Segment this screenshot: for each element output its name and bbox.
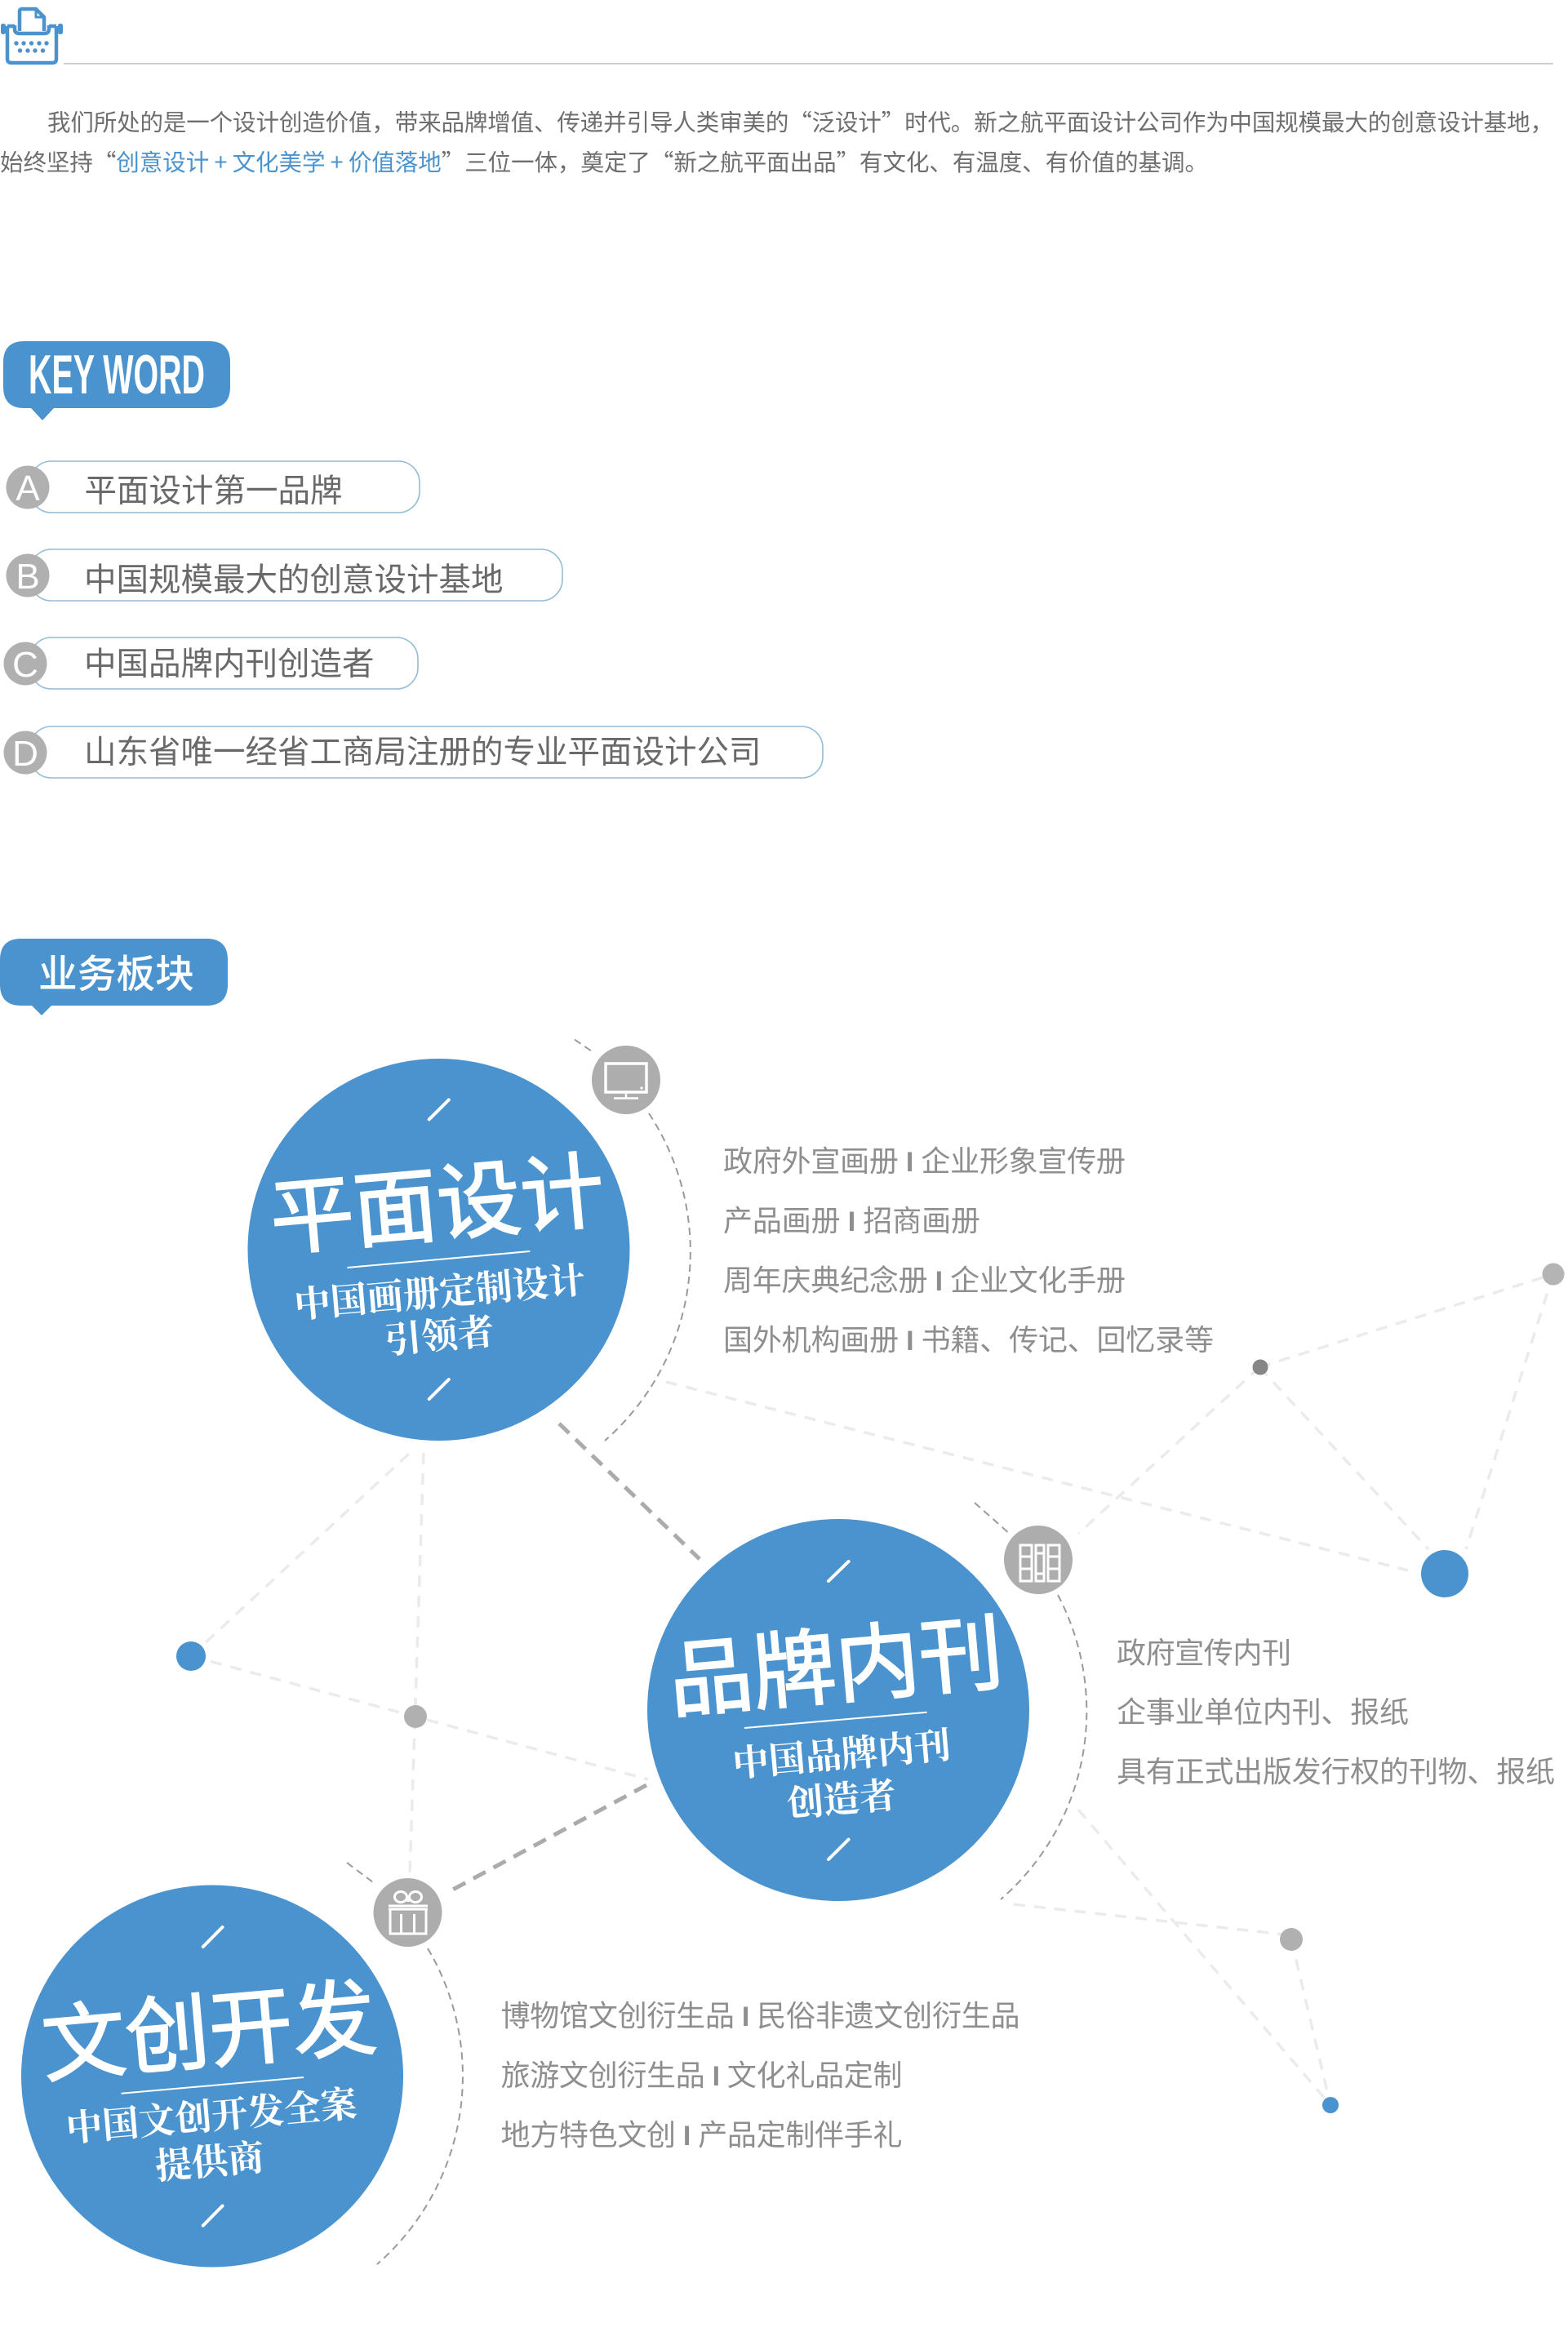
panel: cultural products: 中国文创开发全案 bbox=[64, 2075, 359, 2152]
panel: cultural products: 文创开发 bbox=[37, 1949, 380, 2100]
heading: business sections: 业务板块 bbox=[38, 943, 194, 999]
keyword C: 中国品牌内刊创造者 bbox=[84, 638, 374, 685]
panel: graphic design bbox=[248, 1040, 691, 1441]
text: brand journal services bbox=[1117, 1629, 1555, 1791]
icon: monitor bbox=[592, 1046, 660, 1114]
panel: brand journal: 品牌内刊 bbox=[664, 1584, 1007, 1735]
connector: brand journal to cultural products bbox=[450, 1785, 646, 1891]
keyword A: 平面设计第一品牌 bbox=[85, 465, 343, 512]
icon: typewriter bbox=[1, 9, 63, 63]
panel: cultural products: 提供商 bbox=[153, 2128, 266, 2190]
keyword C bbox=[3, 637, 418, 689]
text: cultural product services: 旅游文创衍生品 I 文化礼品定制 bbox=[501, 2052, 903, 2094]
heading: KEY WORD: KEY WORD bbox=[29, 344, 205, 406]
dashed arc bbox=[347, 1863, 463, 2264]
keyword A bbox=[7, 461, 420, 513]
connector: graphic design to brand journal bbox=[559, 1424, 700, 1559]
text: graphic design services: 国外机构画册 I 书籍、传记、回忆录等 bbox=[723, 1317, 1214, 1359]
heading: business sections bbox=[0, 939, 228, 1015]
dashed arc bbox=[975, 1503, 1086, 1899]
keyword D: 山东省唯一经省工商局注册的专业平面设计公司 bbox=[84, 726, 761, 773]
panel: brand journal: 中国品牌内刊 bbox=[730, 1716, 953, 1788]
text: brand journal services: 政府宣传内刊 bbox=[1117, 1629, 1291, 1672]
keyword B: 中国规模最大的创意设计基地 bbox=[84, 554, 503, 601]
text: cultural product services: 博物馆文创衍生品 I 民俗非遗文创衍生品 bbox=[501, 1992, 1020, 2035]
keyword C: C bbox=[12, 645, 38, 685]
intro paragraph: 我们所处的是一个设计创造价值，带来品牌增值、传递并引导人类审美的“泛设计”时代。新之航平面设计公司作为中国规模最大的创意设计基地， bbox=[47, 104, 1553, 138]
icon: books bbox=[1004, 1526, 1073, 1594]
panel: cultural products bbox=[21, 1863, 463, 2268]
panel: brand journal bbox=[647, 1503, 1086, 1901]
panel: graphic design: 平面设计 bbox=[264, 1122, 609, 1273]
heading: KEY WORD bbox=[3, 341, 230, 420]
panel: graphic design: 引领者 bbox=[383, 1302, 496, 1364]
text: graphic design services: 周年庆典纪念册 I 企业文化手册 bbox=[723, 1257, 1126, 1299]
keyword B: B bbox=[16, 557, 40, 597]
intro paragraph bbox=[0, 104, 1553, 178]
dashed arc bbox=[575, 1040, 691, 1441]
keyword A: A bbox=[16, 469, 40, 509]
panel: graphic design: 中国画册定制设计 bbox=[291, 1251, 587, 1328]
text: brand journal services: 具有正式出版发行权的刊物、报纸 bbox=[1117, 1748, 1555, 1791]
keyword B bbox=[7, 549, 562, 601]
text: cultural product services: 地方特色文创 I 产品定制伴手礼 bbox=[501, 2112, 903, 2154]
network nodes bbox=[176, 1264, 1564, 2113]
icon: gift bbox=[374, 1878, 442, 1947]
panel: brand journal: 创造者 bbox=[784, 1766, 898, 1828]
keyword D: D bbox=[12, 734, 38, 774]
text: brand journal services: 企事业单位内刊、报纸 bbox=[1117, 1689, 1409, 1731]
text: graphic design services: 产品画册 I 招商画册 bbox=[723, 1197, 980, 1240]
network background lines bbox=[191, 1274, 1553, 2105]
text: graphic design services bbox=[723, 1138, 1214, 1359]
text: cultural product services bbox=[501, 1992, 1020, 2154]
intro paragraph: 始终坚持“创意设计 + 文化美学 + 价值落地”三位一体，奠定了“新之航平面出品”有文化、有温度、有价值的基调。 bbox=[0, 144, 1208, 178]
text: graphic design services: 政府外宣画册 I 企业形象宣传册 bbox=[723, 1138, 1126, 1180]
